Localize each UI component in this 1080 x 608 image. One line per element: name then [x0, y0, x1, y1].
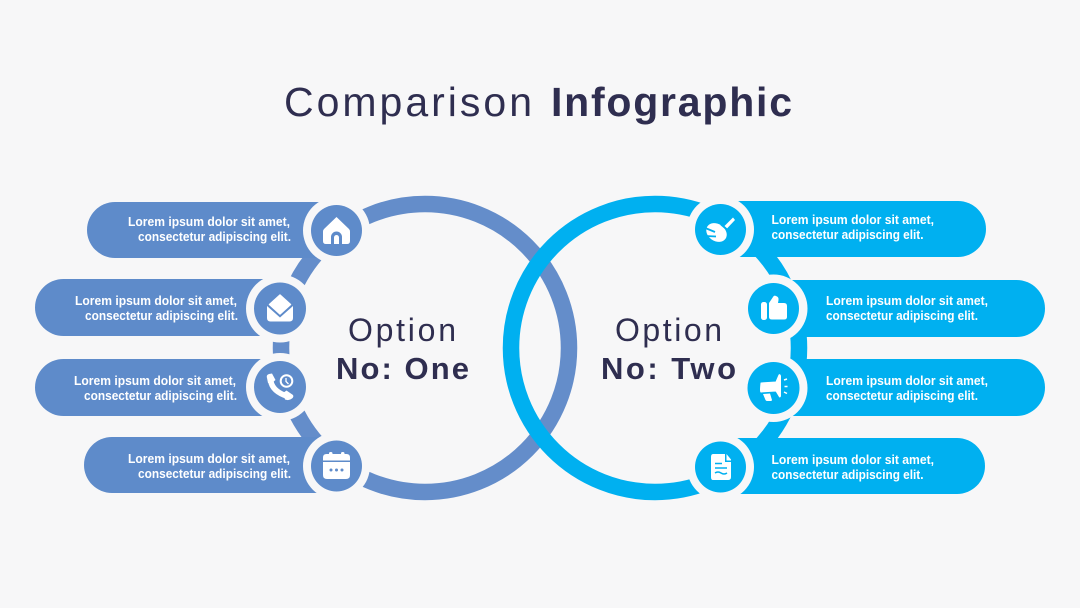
text: right item 1: consectetur adipiscing elit. [772, 228, 924, 242]
text: right item 2: consectetur adipiscing elit. [826, 309, 978, 323]
text: left item 3: Lorem ipsum dolor sit amet, [74, 374, 236, 388]
label: option one [336, 312, 469, 386]
icon: calendar [323, 452, 350, 479]
icon: broom [703, 218, 735, 246]
text: left item 1: consectetur adipiscing elit. [138, 230, 291, 244]
text: left item 2: consectetur adipiscing elit. [85, 309, 238, 323]
text: left item 4: Lorem ipsum dolor sit amet, [128, 452, 290, 466]
icon: megaphone [760, 375, 788, 401]
panel: right item 3 [740, 354, 1045, 422]
text: right item 4 [772, 453, 934, 482]
panel: left item 2 [35, 274, 314, 342]
text: right item 1 [772, 213, 934, 242]
text: right item 1: Lorem ipsum dolor sit amet, [772, 213, 934, 227]
title [284, 79, 792, 125]
text: left item 4: consectetur adipiscing elit. [138, 467, 291, 481]
title: Comparison [284, 79, 532, 125]
label: option two: No: Two [601, 351, 736, 386]
icon: phone and clock [267, 374, 294, 400]
panel: left item 3 [35, 353, 314, 421]
icon: open envelope [267, 295, 293, 322]
label: option two: Option [615, 312, 722, 348]
text: right item 2 [826, 294, 988, 323]
title: Infographic [551, 79, 792, 125]
label: option two [601, 312, 736, 386]
text: right item 3 [826, 374, 988, 403]
icon: thumbs up [761, 296, 787, 320]
label: option one: No: One [336, 351, 469, 386]
text: left item 4 [128, 452, 291, 481]
icon: document [711, 454, 731, 480]
label: option one: Option [348, 312, 456, 348]
ring: option two [511, 204, 799, 492]
panel: right item 1 [687, 196, 986, 263]
text: left item 2 [75, 294, 238, 323]
text: left item 3: consectetur adipiscing elit. [84, 389, 237, 403]
panel: left item 4 [84, 432, 370, 500]
text: left item 2: Lorem ipsum dolor sit amet, [75, 294, 237, 308]
text: left item 3 [74, 374, 237, 403]
text: right item 2: Lorem ipsum dolor sit amet, [826, 294, 988, 308]
text: right item 4: Lorem ipsum dolor sit amet, [772, 453, 934, 467]
text: left item 1: Lorem ipsum dolor sit amet, [128, 215, 290, 229]
text: right item 3: Lorem ipsum dolor sit amet, [826, 374, 988, 388]
panel: right item 4 [687, 434, 985, 500]
text: right item 3: consectetur adipiscing elit. [826, 389, 978, 403]
text: left item 1 [128, 215, 291, 244]
panel: right item 2 [740, 274, 1045, 342]
ring: option one [281, 204, 569, 492]
panel: left item 1 [87, 197, 370, 264]
icon: house [323, 217, 350, 244]
text: right item 4: consectetur adipiscing elit. [772, 468, 924, 482]
